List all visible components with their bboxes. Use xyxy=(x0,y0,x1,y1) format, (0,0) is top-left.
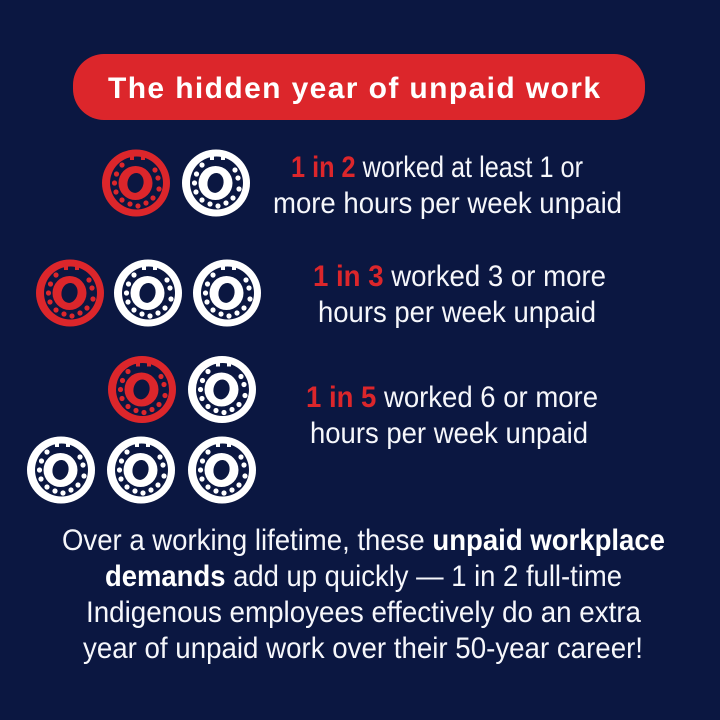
text: 1 in 3 statistic: hours per week unpaid xyxy=(318,296,596,329)
text: 1 in 3 statistic: 1 in 3 worked 3 or more xyxy=(313,260,606,293)
icons: 1 in 5 xyxy=(27,356,256,504)
text: 1 in 2 statistic: more hours per week unpaid xyxy=(273,187,622,220)
icons: 1 in 3 xyxy=(36,260,261,326)
text: 1 in 3 statistic xyxy=(313,260,606,329)
closing paragraph xyxy=(62,524,665,665)
closing paragraph: demands add up quickly — 1 in 2 full-time xyxy=(105,560,622,593)
text: 1 in 2 statistic: 1 in 2 worked at least 1 or xyxy=(291,151,583,184)
text: 1 in 2 statistic xyxy=(273,151,622,220)
closing paragraph: year of unpaid work over their 50-year career! xyxy=(83,632,643,665)
closing paragraph: Over a working lifetime, these unpaid workplace xyxy=(62,524,665,557)
icons: 1 in 2 xyxy=(102,150,250,216)
text: 1 in 5 statistic: 1 in 5 worked 6 or more xyxy=(306,381,598,414)
closing paragraph: Indigenous employees effectively do an extra xyxy=(86,596,641,629)
text: 1 in 5 statistic xyxy=(306,381,598,450)
text: 1 in 5 statistic: hours per week unpaid xyxy=(310,417,588,450)
title banner xyxy=(73,54,645,120)
title banner: The hidden year of unpaid work xyxy=(108,72,600,105)
